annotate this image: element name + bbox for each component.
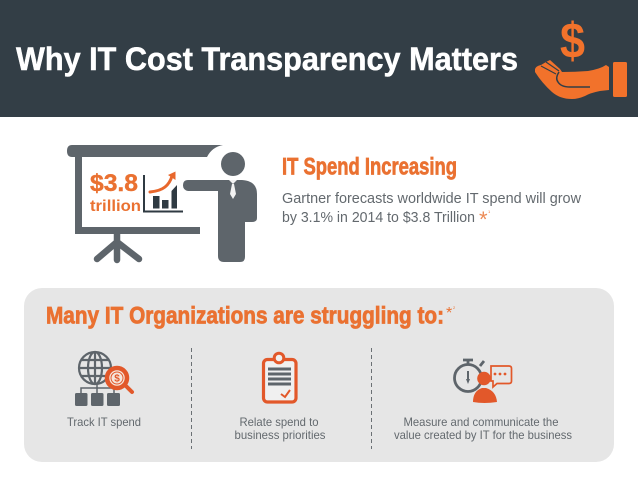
section heading: IT Spend Increasing: IT Spend Increasing (282, 154, 457, 180)
icon: hand holding dollar (535, 13, 627, 99)
icon: hand holding dollar: $ (560, 13, 585, 69)
icon: clipboard (264, 353, 296, 402)
body text: Gartner forecast: Gartner forecasts worldwide IT spend will grow (282, 190, 581, 207)
panel: struggles (24, 288, 614, 462)
header banner (0, 0, 638, 117)
footnote marker (446, 305, 456, 322)
icon: presenter (183, 152, 257, 262)
label: measure: Measure and communicate the (404, 415, 559, 429)
label: relate: Relate spend to (240, 415, 319, 429)
board figure: $3.8 (90, 170, 138, 197)
label: relate: business priorities (234, 428, 326, 442)
body text: Gartner forecast: by 3.1% in 2014 to $3.8 Trillion (282, 209, 475, 226)
label: measure: value created by IT for the business (394, 428, 572, 442)
title: Why IT Cost Transparency Matters (16, 41, 518, 77)
body text: Gartner forecast (282, 190, 581, 232)
board label: trillion (90, 198, 141, 215)
footnote marker: * (446, 305, 452, 322)
footnote marker: 2 (453, 305, 456, 310)
presentation board (67, 145, 223, 260)
label: track: Track IT spend (67, 415, 141, 429)
label: measure (394, 415, 572, 442)
body text: Gartner forecast: 1 (488, 209, 491, 214)
icon: globe with magnifier: $ (114, 374, 120, 384)
icon: globe with magnifier (75, 352, 132, 406)
board legs (97, 234, 139, 260)
icon: stopwatch and speaker (454, 360, 512, 403)
body text: Gartner forecast: * (479, 207, 488, 232)
panel heading: Many IT Organizations are struggling to: (46, 302, 444, 330)
mini bar chart (144, 172, 183, 212)
label: relate (234, 415, 326, 442)
